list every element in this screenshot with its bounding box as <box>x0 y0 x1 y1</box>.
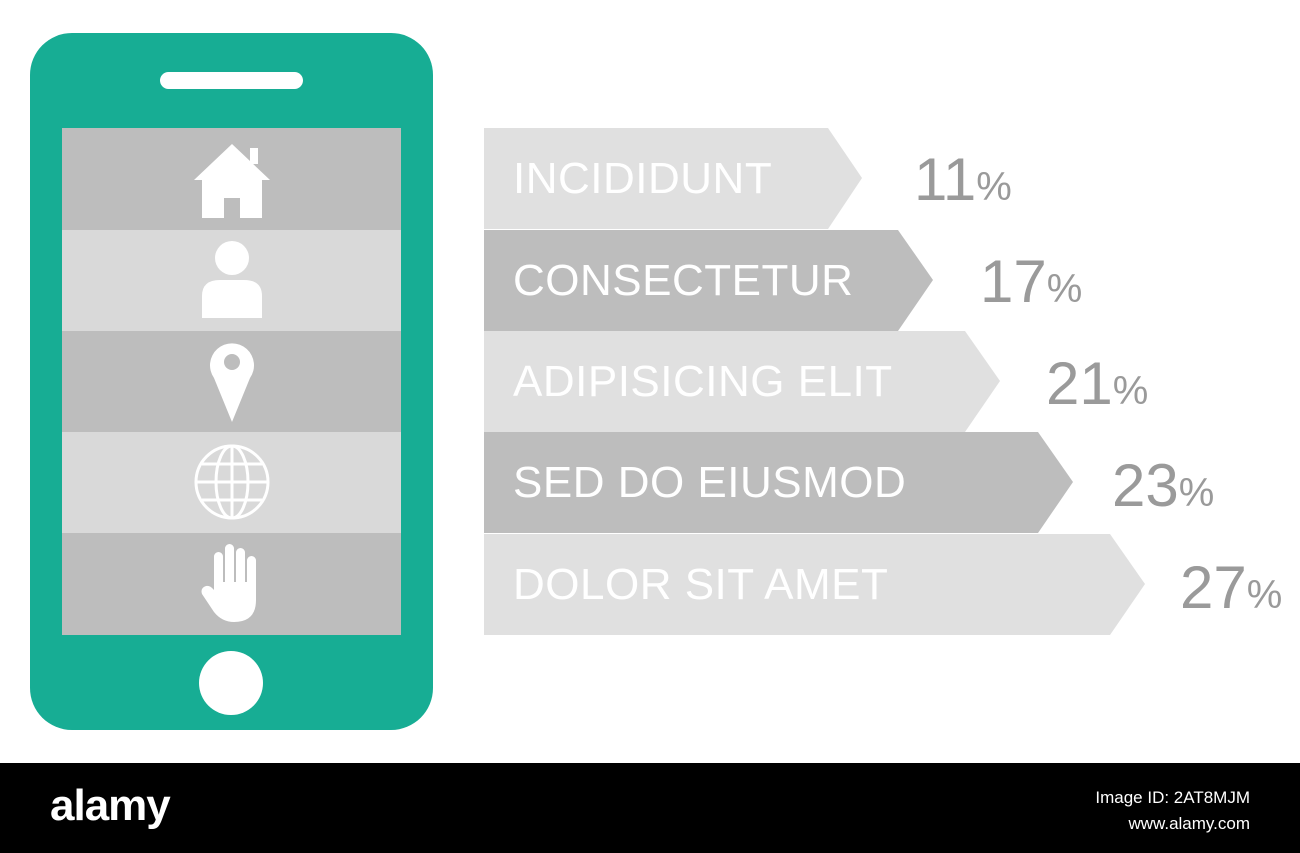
footer info: Image ID: 2AT8MJM <box>1095 788 1250 807</box>
label 4: SED DO EIUSMOD <box>513 458 906 507</box>
icon: hand <box>202 544 256 622</box>
icon: person <box>202 241 262 318</box>
value 21%: 21% <box>1046 350 1148 417</box>
label 5: DOLOR SIT AMET <box>513 560 888 609</box>
icon: home <box>194 144 270 218</box>
bar chart: arrows <box>484 128 1145 635</box>
phone <box>30 33 433 730</box>
label 1: INCIDIDUNT <box>513 154 772 203</box>
footer logo: alamy <box>50 781 170 830</box>
value 17%: 17% <box>980 248 1082 315</box>
value 23%: 23% <box>1112 452 1214 519</box>
home button <box>199 651 263 715</box>
label 3: ADIPISICING ELIT <box>513 357 893 406</box>
icon: globe <box>194 444 270 520</box>
footer bar <box>0 763 1300 853</box>
value 11%: 11% <box>914 146 1012 213</box>
icon: location pin <box>210 343 254 422</box>
speaker slot <box>160 72 303 89</box>
value 27%: 27% <box>1180 554 1282 621</box>
footer info <box>1095 788 1250 833</box>
label 2: CONSECTETUR <box>513 256 853 305</box>
screen <box>62 128 401 635</box>
footer info: www.alamy.com <box>1128 814 1250 833</box>
